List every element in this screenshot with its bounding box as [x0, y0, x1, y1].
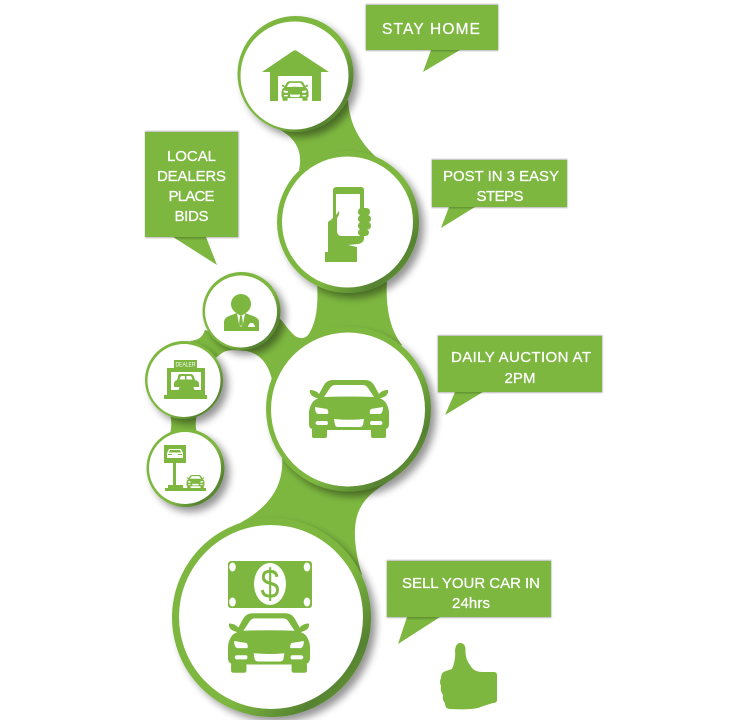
circle: stay home garage: [238, 16, 354, 132]
circle: roadside sign: [146, 429, 224, 507]
icon: car front: [309, 380, 389, 438]
callout: sell your car in 24hrs: 24hrs: [452, 595, 490, 612]
callout: daily auction at 2pm: 2PM: [504, 370, 536, 387]
callout: local dealers place bids: PLACE: [168, 188, 214, 205]
icon: dollar banknote: [228, 560, 312, 608]
callout: daily auction at 2pm: DAILY AUCTION AT: [451, 349, 591, 366]
connector: daily auction to sell: [228, 455, 394, 575]
circle: local dealer person: [202, 272, 280, 350]
callout: sell your car in 24hrs: SELL YOUR CAR IN: [402, 575, 540, 592]
callout: local dealers place bids: LOCAL: [167, 148, 216, 165]
callout: stay home: STAY HOME: [382, 21, 480, 38]
callout: local dealers place bids: BIDS: [174, 208, 208, 225]
callout: stay home: [366, 4, 498, 72]
circle: sell your car: [172, 518, 371, 717]
icon: garage with car: [262, 50, 329, 101]
callout: sell your car in 24hrs: [386, 560, 552, 644]
callout: local dealers place bids: DEALERS: [157, 168, 226, 185]
circle: dealer showroom: [145, 341, 223, 419]
icon: dealer showroom: DEALER: [176, 362, 196, 368]
icon: sign with car: [164, 445, 206, 491]
connector: stay home to post: [272, 100, 385, 170]
circle: daily auction car: [266, 326, 431, 492]
circle: post with phone: [277, 151, 419, 293]
callout: daily auction at 2pm: [438, 335, 602, 415]
callout: local dealers place bids: [145, 131, 239, 265]
callout: post in 3 easy steps: [432, 159, 568, 228]
icon: hand holding phone: [325, 187, 371, 262]
icon: thumbs up: [440, 643, 497, 709]
icon: car front: [228, 613, 310, 673]
icon: dealer person: [224, 294, 259, 331]
connector: post, dealers and daily auction: [190, 280, 402, 410]
callout: post in 3 easy steps: POST IN 3 EASY: [443, 168, 559, 185]
connector: dealer to sign: [169, 410, 198, 438]
icon: dollar banknote: $: [260, 560, 280, 607]
callout: post in 3 easy steps: STEPS: [476, 188, 524, 205]
